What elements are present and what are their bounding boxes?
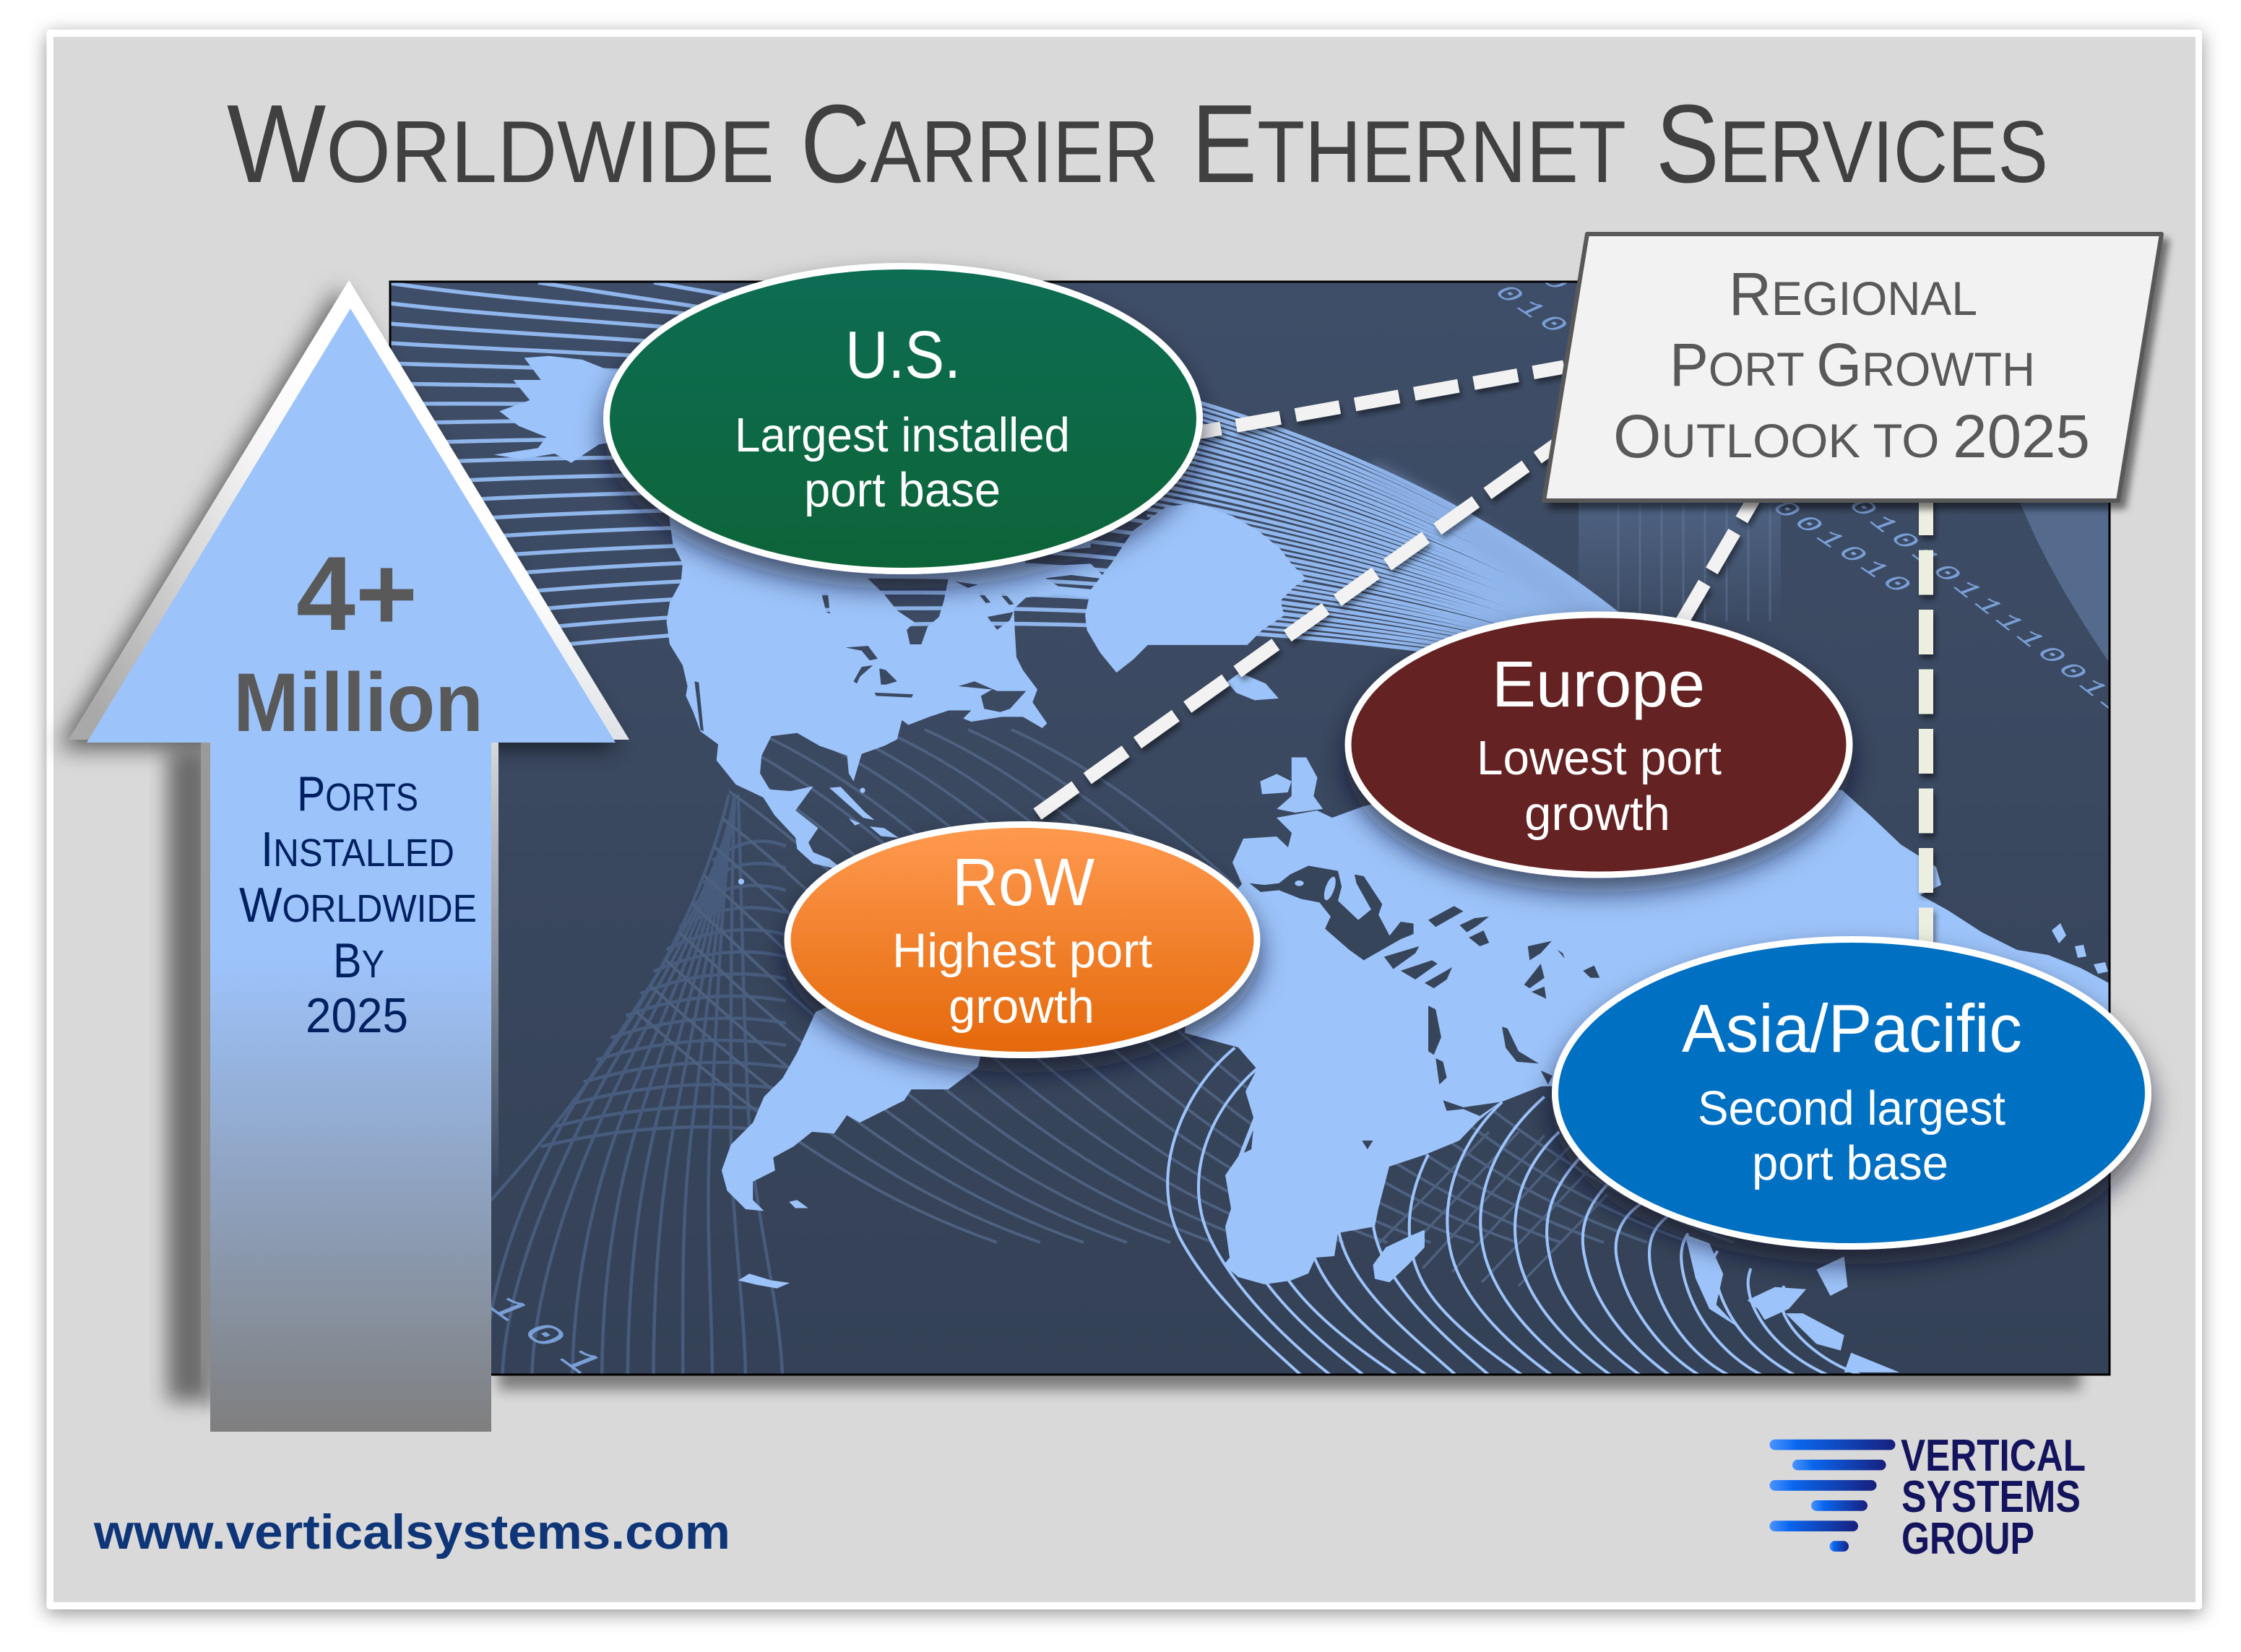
binary digits: 001010: [1761, 498, 1924, 600]
callout: Europe: [1348, 615, 1849, 875]
binary digits: 101: [472, 1292, 625, 1388]
connector: RoW: [1037, 436, 1568, 814]
arrow face: [87, 308, 616, 1432]
net grid: [484, 795, 786, 1384]
binary digits: 010: [1484, 282, 1581, 340]
map shadow: [498, 1084, 2081, 1390]
logo mark: [1770, 1440, 1896, 1552]
binary digits: [472, 269, 2141, 1388]
world map panel: [392, 283, 2108, 1374]
callout: U.S.: U.S.: [845, 317, 961, 392]
callout: RoW: [787, 825, 1257, 1055]
binary digits: 0: [1530, 269, 1583, 298]
logo wordmark: GROUP: [1901, 1514, 2034, 1564]
title: ETHERNET: [1191, 82, 1626, 206]
eurasia and africa: [1185, 758, 2113, 1284]
callout: RoW: Highest port: [892, 924, 1152, 978]
callout: RoW: RoW: [952, 844, 1094, 920]
south east asia: [1685, 1234, 1899, 1372]
continents: [494, 356, 2113, 1372]
title: SERVICES: [1656, 82, 2048, 206]
greenland iceland britain: [1085, 503, 1323, 813]
outlook label box: PORT GROWTH: [1670, 331, 2035, 399]
website url: www.verticalsystems.com: [93, 1505, 730, 1560]
arrow headline: [233, 535, 483, 749]
south america: [722, 878, 982, 1289]
arrow headline: 4+: [296, 535, 418, 652]
arctic arc stripes: [392, 283, 1618, 652]
outlook label box: OUTLOOK TO 2025: [1613, 402, 2090, 470]
vertical light band: [1579, 498, 1781, 621]
dim curved lines: [636, 728, 1734, 1244]
inland seas: [1244, 865, 1599, 1153]
callout: RoW: growth: [949, 979, 1094, 1034]
callout: Asia/Pacific: [1555, 939, 2149, 1247]
arc glow: [1365, 459, 1509, 545]
callout: U.S.: [607, 266, 1199, 571]
callout: Europe: Lowest port: [1477, 731, 1722, 785]
binary digits: 0101011110011: [1838, 496, 2141, 720]
arrow caption: 2025: [306, 988, 408, 1043]
callout: Asia/Pacific: Asia/Pacific: [1682, 990, 2022, 1066]
logo wordmark: VERTICAL: [1901, 1431, 2086, 1481]
callout: Asia/Pacific: Second largest: [1698, 1081, 2005, 1136]
map border: [390, 282, 2110, 1375]
arrow caption: PORTS: [297, 766, 418, 821]
arc stripes dense right part: [1147, 407, 1587, 647]
connector: Europe: [1682, 498, 1754, 622]
dashed connector lines: [1037, 367, 1926, 953]
logo wordmark: [1901, 1431, 2086, 1564]
logo: Vertical Systems Group: [1770, 1431, 2086, 1564]
arrow caption: INSTALLED: [261, 822, 454, 877]
top right hatched curve: [2020, 503, 2108, 662]
arrow caption: [239, 766, 477, 1043]
connector: U.S.: [1177, 367, 1564, 436]
callout: Asia/Pacific: port base: [1752, 1136, 1948, 1190]
arrow caption: BY: [333, 933, 384, 988]
logo wordmark: SYSTEMS: [1901, 1472, 2081, 1522]
title: [227, 82, 2048, 206]
arrow backing: [69, 280, 629, 1416]
callout: Europe: growth: [1524, 787, 1670, 841]
caribbean islands: [829, 787, 899, 838]
connector: Asia/Pacific: [1919, 490, 1933, 953]
up arrow: [69, 280, 629, 1432]
alaska: [494, 356, 649, 463]
shaft shadow: [168, 751, 212, 1401]
callout: U.S.: Largest installed: [735, 408, 1070, 462]
north america: [665, 486, 1107, 884]
arrow headline: Million: [233, 657, 483, 749]
callout: U.S.: port base: [804, 463, 1001, 517]
arrow caption: WORLDWIDE: [239, 878, 477, 933]
indian ocean bright arcs: [1167, 1048, 1862, 1375]
title: WORLDWIDE: [227, 82, 774, 206]
callout: Europe: Europe: [1492, 649, 1705, 721]
outlook label box: REGIONAL: [1729, 260, 1977, 328]
title: CARRIER: [800, 82, 1159, 206]
outlook label box: [1544, 234, 2162, 501]
madagascar: [1373, 1230, 1425, 1282]
japan islands: [2052, 923, 2108, 974]
